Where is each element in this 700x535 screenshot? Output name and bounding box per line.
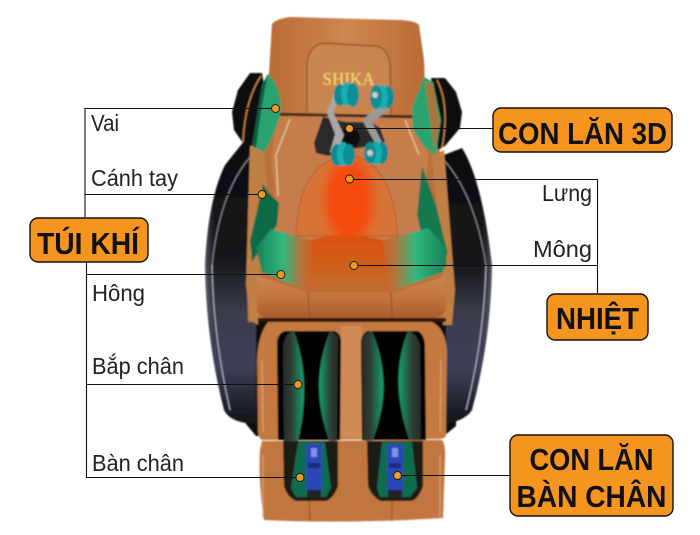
connector line: foot roller (397, 474, 510, 476)
left arm (205, 140, 262, 424)
connector lines: heat (349, 180, 598, 293)
right calf well (361, 331, 426, 440)
3D roller mechanism (314, 82, 394, 166)
shoulder wing right (412, 77, 462, 155)
foot rest (260, 440, 445, 522)
roller top right (370, 85, 394, 109)
left calf airbag inner (319, 331, 338, 443)
side trim (246, 146, 455, 325)
chair body tan underlay (247, 110, 452, 322)
left foot well (283, 441, 338, 501)
label: Cánh tay: Cánh tay (91, 165, 178, 191)
label: Bắp chân: Bắp chân (92, 353, 184, 379)
label: Bàn chân: Bàn chân (92, 450, 184, 476)
label: Mông: Mông (533, 236, 592, 262)
arm airbag right (417, 166, 447, 268)
arm airbag left (250, 184, 279, 262)
badge: TÚI KHÍ: TÚI KHÍ (37, 225, 140, 261)
headrest panel (307, 43, 391, 116)
seat front (257, 276, 446, 319)
leg rest (257, 322, 447, 443)
seat cushion side left (256, 229, 310, 291)
shoulder wing left (232, 73, 281, 152)
bracket arms (327, 90, 344, 155)
dark chair base behind legs (244, 300, 458, 436)
backrest upper cushion (268, 17, 426, 116)
connector line: 3D roller (349, 128, 493, 130)
right arm (436, 148, 492, 424)
roller top left (334, 82, 359, 107)
left calf airbag outer (283, 331, 304, 442)
label: Hông: Hông (92, 280, 145, 306)
backrest lower cushion (271, 116, 428, 240)
logo SHIKA: SHIKA (322, 69, 374, 89)
badge: NHIỆT: NHIỆT (556, 300, 639, 336)
right foot well (367, 441, 423, 501)
label: Lưng: Lưng (542, 180, 592, 206)
roller bottom left (331, 142, 355, 166)
heat zone: back (296, 155, 398, 242)
massage chair (205, 17, 492, 522)
badge: CON LĂN BÀN CHÂN (510, 435, 673, 516)
connector lines: air bags (85, 108, 300, 478)
roller bottom right (364, 141, 388, 165)
badge: CON LĂN BÀN CHÂN: CON LĂN (530, 442, 654, 477)
label: Vai: Vai (91, 110, 119, 136)
badge: CON LĂN 3D: CON LĂN 3D (498, 116, 667, 151)
mounting plate (314, 117, 385, 156)
right calf airbag outer (362, 331, 384, 442)
badge: NHIỆT (547, 294, 648, 340)
left calf well (277, 331, 341, 440)
marker dots (258, 104, 402, 482)
seat cushion side right (384, 228, 448, 291)
right calf airbag inner (398, 331, 421, 442)
seat centre heat zone (308, 235, 392, 295)
badge: CON LĂN BÀN CHÂN: BÀN CHÂN (516, 478, 666, 514)
